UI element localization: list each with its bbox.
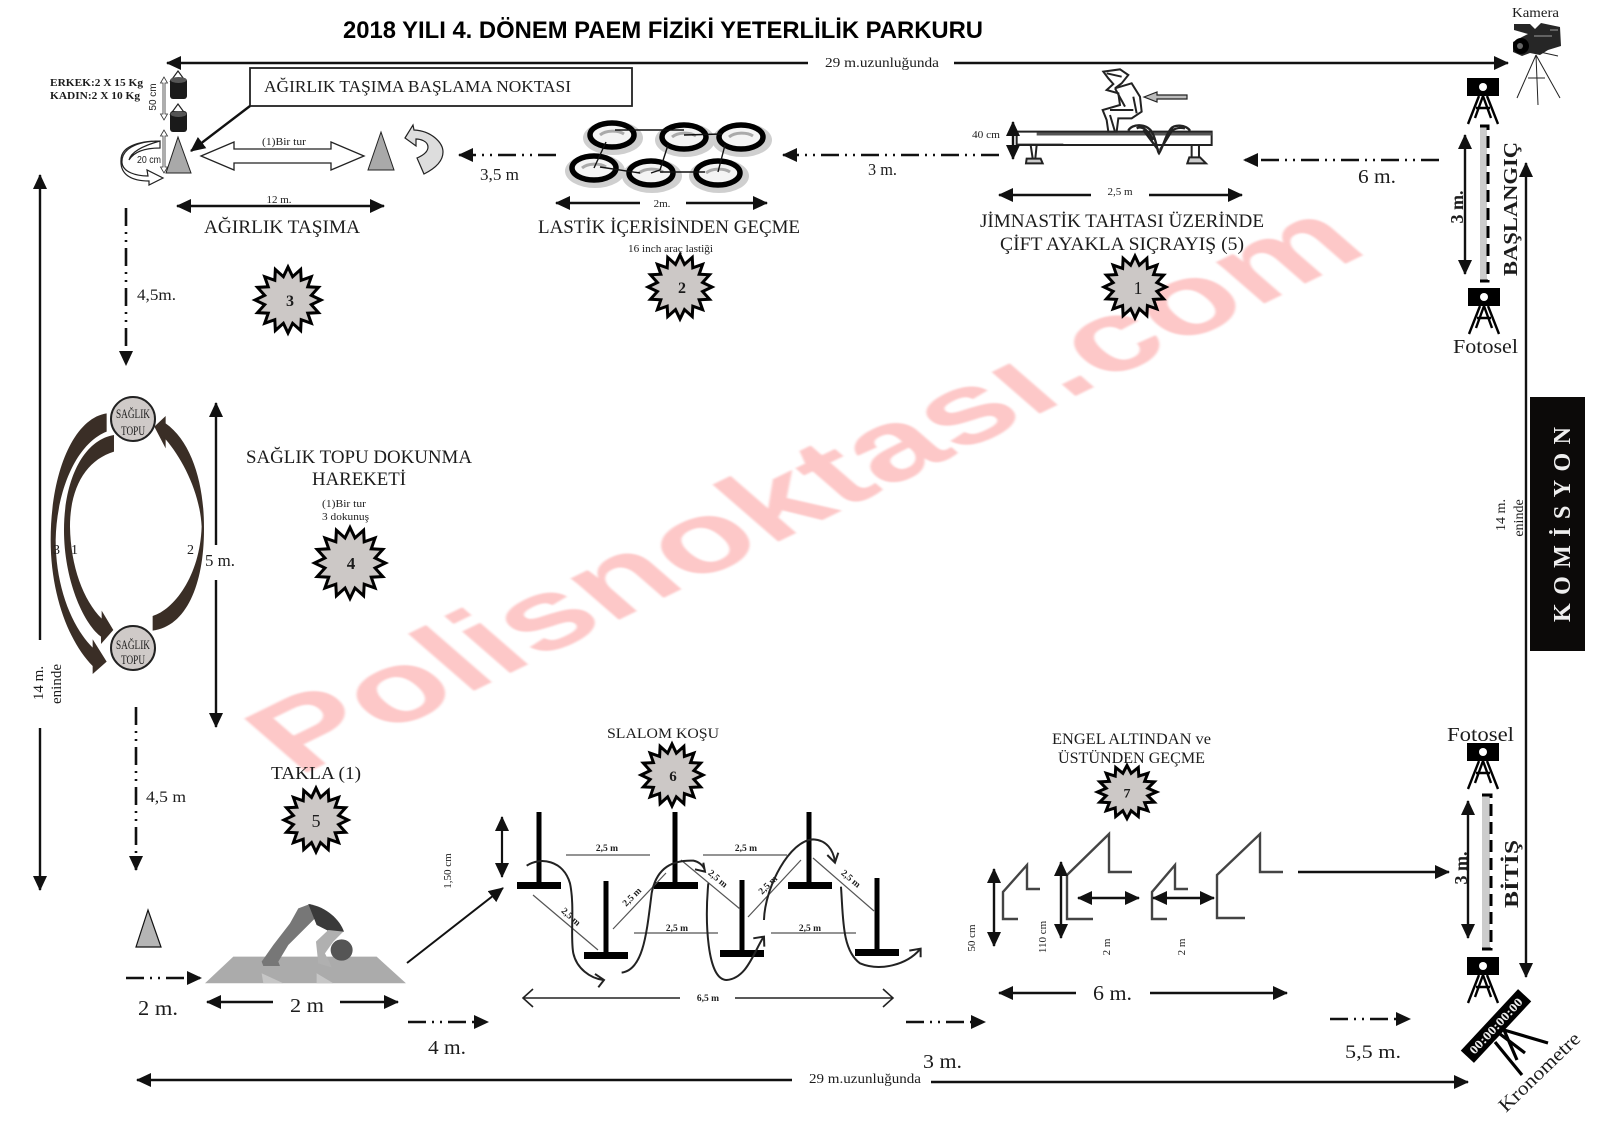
icon: turn arrow right [405,125,443,174]
badge 1 [1104,256,1166,318]
icon: cone before mat [136,910,161,947]
distance 3 m bottom [906,1022,985,1073]
finish line group [1447,725,1523,1003]
distance 2 m: 2 m. [138,996,178,1020]
photocell label: Fotosel [1447,725,1515,746]
icon: photocell top [1467,743,1499,789]
left dimension: 14 m: eninde [49,664,65,704]
spacing labels [559,844,862,934]
distance 4 m [408,1022,488,1059]
station 1 labels: ÇİFT AYAKLA SIÇRAYIŞ (5) [1000,234,1244,255]
distance 5,5 m [1330,1019,1410,1063]
icon: gym bench with jumper: 40 cm [972,129,1000,141]
spacing labels: 2,5 m [621,886,644,909]
icon: gym bench with jumper [972,69,1212,163]
spacing lines [533,855,874,950]
panel: komisyon [1530,397,1585,651]
start line group [1447,78,1522,358]
station 4 heading [246,446,472,523]
spacing labels: 2,5 m [757,874,780,897]
finish line group: 3 m. [1451,852,1471,884]
badge 5 [284,788,348,852]
badge 3 [255,267,321,333]
badge 2: 2 [678,280,686,297]
distance 3 m bottom: 3 m. [923,1051,962,1073]
hurdle labels: 2 m [1176,938,1188,955]
weight labels: ERKEK:2 X 15 Kg [50,78,144,89]
finish label: BİTİŞ [1499,840,1523,908]
weight labels: KADIN:2 X 10 Kg [50,91,141,102]
spacing labels: 2,5 m [839,869,862,890]
start strip [1480,126,1487,281]
hurdle labels [966,920,1188,955]
right dimension: 14 m: eninde [1512,499,1527,537]
station 4 heading: (1)Bir tur [322,498,366,510]
lap label: (1)Bir tur [262,136,306,148]
height 40 cm [1012,122,1014,159]
icon: cone left [166,137,191,173]
station 1 labels: JİMNASTİK TAHTASI ÜZERİNDE [980,211,1264,232]
distance 5,5 m: 5,5 m. [1345,1043,1401,1063]
distance 4,5 m bottom: 4,5 m [146,789,186,806]
arrow to slalom [407,888,503,963]
badge 6: 6 [669,769,677,785]
chart: slalom poles: 1,50 cm [442,853,454,889]
distance 3,5 m [459,155,556,184]
dimension 3 m [1467,801,1469,938]
station 4: medicine ball circuit [51,397,235,727]
right dimension: 14 m: 14 m. [1494,499,1509,531]
spacing labels: 2,5 m [799,924,821,934]
step numbers [53,543,194,558]
station 1 labels: 2,5 m [1107,186,1133,198]
start line group: 3 m. [1447,190,1467,224]
badge 5: 5 [312,811,320,831]
distance 6 m: 6 m. [1358,166,1396,188]
bottom dimension: 29 m: 29 m.uzunluğunda [809,1071,921,1086]
spacing labels: 2,5 m [735,844,757,854]
ball bottom: TOPU [121,653,145,667]
icon: photocell bottom [1467,957,1499,1003]
badge 4: 4 [347,554,356,573]
hurdle labels: 50 cm [966,924,978,952]
distance 4 m: 4 m. [428,1037,466,1059]
dimension: mat 2 m: 2 m [290,995,324,1017]
step numbers: 3 [53,543,60,558]
icon: gymnast on mat [205,904,406,983]
hurdle labels: 110 cm [1037,920,1049,953]
spacing labels: 2,5 m [559,906,582,929]
station 2 labels: LASTİK İÇERİSİNDEN GEÇME [538,217,800,238]
station 4 heading: SAĞLIK TOPU DOKUNMA [246,446,472,468]
panel: komisyon: KOMİSYON [1550,426,1576,622]
badge 7: 7 [1124,786,1131,800]
badge 2 [648,255,712,319]
station 7 heading [1052,731,1211,767]
left dimension: 14 m: 14 m. [31,666,47,700]
icon: weights [137,71,187,173]
distance 3 m: 3 m. [868,160,897,179]
arrow to finish [1298,871,1449,873]
station 5 heading: TAKLA (1) [271,763,361,784]
chart: slalom poles [442,812,921,1004]
icon: camera on tripod [1512,5,1561,105]
left dimension: 14 m [31,175,65,890]
height 1,50 cm [501,817,503,877]
icon: photocell top [1467,78,1499,124]
badge 1: 1 [1134,278,1142,298]
station 6 heading: SLALOM KOŞU [607,726,720,742]
station 3: weight carry course [121,125,443,238]
title: 2018 YILI 4. DÖNEM PAEM FİZİKİ YETERLİLİK PARKURU [343,17,983,44]
ball bottom [111,626,155,670]
icon: camera on tripod: Kamera [1512,5,1559,20]
top dimension: 29 m: 29 m.uzunluğunda [825,55,939,70]
icon: photocell bottom [1468,288,1500,334]
ball top [111,397,155,441]
right dimension: 14 m [1494,163,1527,977]
ball top: SAĞLIK [116,407,150,421]
hurdle dimensions [993,869,995,946]
station 4 heading: HAREKETİ [312,469,406,490]
icon: tyres [565,121,772,193]
ball top: TOPU [121,424,145,438]
dimension 5 m [215,403,217,545]
badge 4 [314,528,386,598]
hurdle shapes [1003,865,1040,919]
watermark: Polisnoktası.com [216,180,1391,794]
icon: weights: 20 cm [137,155,161,166]
chronometer label: Kronometre [1495,1029,1585,1117]
step numbers: 1 [71,543,78,558]
spacing labels: 2,5 m [596,844,618,854]
double hollow arrow [201,142,364,170]
icon: weights: 50 cm [148,83,159,111]
station 1 labels [980,186,1264,255]
station 4: medicine ball circuit: 5 m. [205,551,235,570]
running path [527,839,921,987]
icon: turn arrow left [121,141,163,185]
photocell label: Fotosel [1453,337,1519,358]
chart: slalom poles: 6,5 m [697,994,719,1004]
finish strip [1482,795,1490,949]
spacing labels: 2,5 m [666,924,688,934]
badge 3: 3 [286,293,294,310]
weight labels [50,78,144,102]
distance 3,5 m: 3,5 m [480,165,519,184]
dimension 3 m [1464,135,1466,274]
distance 2 m [126,978,201,1020]
heading: AĞIRLIK TAŞIMA [204,216,360,238]
dimension 12 m [177,205,384,207]
station 7 heading: ÜSTÜNDEN GEÇME [1058,750,1205,767]
poles [517,812,899,959]
station 2 labels: 2m. [654,198,671,210]
callout: start point: AĞIRLIK TAŞIMA BAŞLAMA NOKTASI [264,77,571,96]
ball bottom: SAĞLIK [116,638,150,652]
icon: chronometer [1461,989,1548,1075]
chart: hurdles [966,834,1283,955]
hurdle labels: 2 m [1101,938,1113,955]
dimension 6 m: 6 m. [1093,981,1132,1005]
step numbers: 2 [187,543,194,558]
icon: cone right [368,132,394,170]
pointer arrow [1144,92,1187,102]
icon: chronometer: 00:00:00:00 [1466,995,1526,1057]
width 6,5 m [523,997,680,999]
badge 6 [641,744,703,806]
curved arrows [51,413,204,674]
start label: BAŞLANGIÇ [1500,142,1522,276]
station 4 heading: 3 dokunuş [322,511,369,523]
station 7 heading: ENGEL ALTINDAN ve [1052,731,1211,748]
station 2 labels: 16 inch araç lastiği [628,243,713,255]
callout: start point [191,68,632,151]
spacing labels: 2,5 m [706,869,729,890]
badge 7 [1098,765,1156,819]
station 2 labels [538,198,800,255]
distance 4,5 m top: 4,5m. [137,287,176,304]
station 3: weight carry course: 12 m. [266,194,292,206]
